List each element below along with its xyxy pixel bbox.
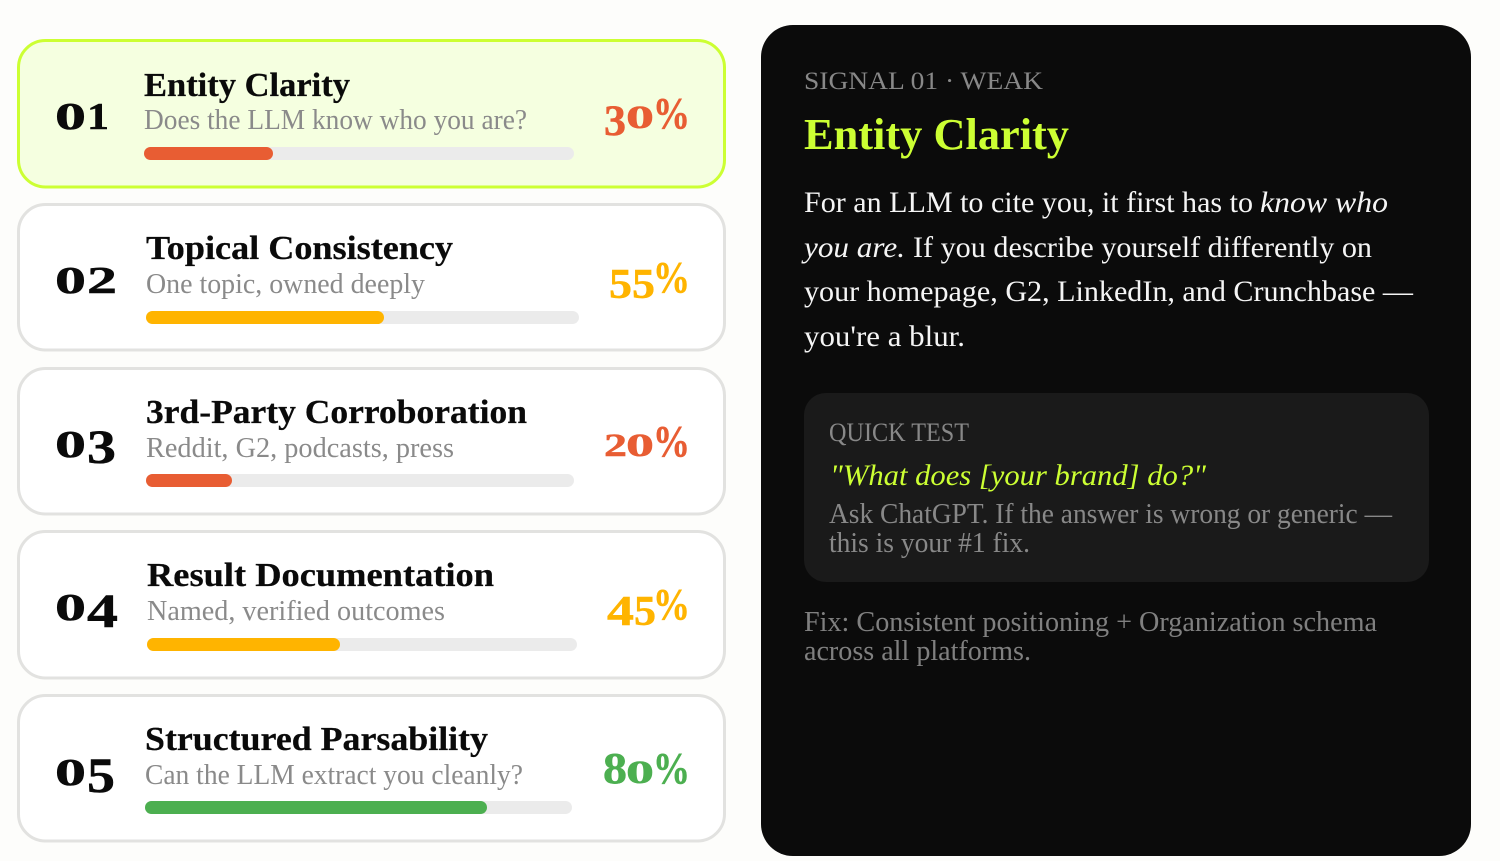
text block: explanation: For an LLM to cite you, it first has to	[804, 186, 1253, 219]
card: 01 Entity Clarity: 0	[626, 100, 654, 136]
card: 01 Entity Clarity: 0	[55, 96, 86, 138]
card: 03 3rd-Party Corroboration: 0	[55, 424, 86, 466]
card: 02 Topical Consistency: One topic, owned deeply	[146, 269, 425, 300]
panel: signal detail	[761, 25, 1471, 856]
callout: quick test: this is your #1 fix.	[829, 528, 1030, 559]
text block: explanation: your homepage, G2, LinkedIn, and Crunchbase —	[804, 275, 1414, 308]
card: 02 Topical Consistency: 5	[632, 262, 655, 308]
heading: Entity Clarity: Entity Clarity	[804, 110, 1069, 159]
card: 02 Topical Consistency: %	[653, 253, 690, 302]
card: 03 3rd-Party Corroboration: 2	[604, 428, 627, 464]
card: 01 Entity Clarity: Entity Clarity	[144, 67, 350, 104]
card: 01 Entity Clarity	[18, 40, 724, 187]
card: 04 Result Documentation: Named, verified outcomes	[147, 596, 445, 627]
card: 05 Structured Parsability: 8	[603, 744, 627, 793]
card: 05 Structured Parsability: Structured Parsability	[145, 721, 488, 758]
card: 02 Topical Consistency: 0	[55, 260, 86, 302]
card: 01 Entity Clarity: 3	[604, 98, 626, 145]
text block: fix: Fix: Consistent positioning + Organization schema	[804, 607, 1378, 638]
callout: quick test: QUICK TEST	[829, 418, 969, 447]
card: 05 Structured Parsability: %	[653, 744, 690, 793]
card: 04 Result Documentation: 0	[55, 587, 86, 629]
card: 03 3rd-Party Corroboration: 3rd-Party Corroboration	[146, 394, 527, 431]
card: 04 Result Documentation	[18, 532, 724, 678]
callout: quick test	[804, 393, 1429, 582]
card: 05 Structured Parsability: 5	[87, 747, 115, 803]
card: 05 Structured Parsability: 0	[626, 755, 654, 791]
card: 02 Topical Consistency: Topical Consistency	[146, 230, 453, 267]
card: 01 Entity Clarity: 1	[87, 96, 109, 138]
panel: signal list	[18, 40, 724, 841]
card: 04 Result Documentation: %	[653, 580, 690, 629]
card: 03 3rd-Party Corroboration: %	[653, 417, 690, 466]
card: 01 Entity Clarity: Does the LLM know who you are?	[144, 105, 527, 136]
card: 03 3rd-Party Corroboration: 0	[626, 428, 654, 464]
text block: fix	[804, 607, 1378, 667]
text block: explanation: If you describe yourself differently on	[913, 231, 1372, 264]
card: 03 3rd-Party Corroboration: 3	[87, 421, 116, 474]
text block: explanation: know who	[1260, 186, 1388, 219]
card: 04 Result Documentation: Result Documentation	[147, 557, 494, 594]
card: 02 Topical Consistency: 5	[609, 262, 632, 308]
card: 04 Result Documentation: 4	[87, 585, 118, 638]
card: 03 3rd-Party Corroboration	[18, 368, 724, 514]
card: 04 Result Documentation: 4	[607, 589, 634, 635]
eyebrow: signal status: SIGNAL 01 · WEAK	[804, 68, 1043, 95]
text block: explanation	[801, 186, 1414, 353]
card: 05 Structured Parsability: 0	[55, 752, 86, 794]
card: 04 Result Documentation: 5	[634, 589, 656, 635]
card: 02 Topical Consistency: 2	[87, 260, 117, 302]
text block: explanation: you are.	[801, 231, 905, 264]
card: 03 3rd-Party Corroboration: Reddit, G2, podcasts, press	[146, 433, 454, 464]
callout: quick test: Ask ChatGPT. If the answer is wrong or generic —	[829, 499, 1393, 530]
text block: fix: across all platforms.	[804, 636, 1031, 667]
card: 02 Topical Consistency	[18, 204, 724, 350]
card: 01 Entity Clarity: %	[653, 89, 690, 138]
card: 05 Structured Parsability: Can the LLM extract you cleanly?	[145, 760, 523, 791]
text block: explanation: you're a blur.	[804, 320, 965, 353]
card: 05 Structured Parsability	[18, 696, 724, 841]
callout: quick test: "What does [your brand] do?"	[830, 459, 1206, 492]
